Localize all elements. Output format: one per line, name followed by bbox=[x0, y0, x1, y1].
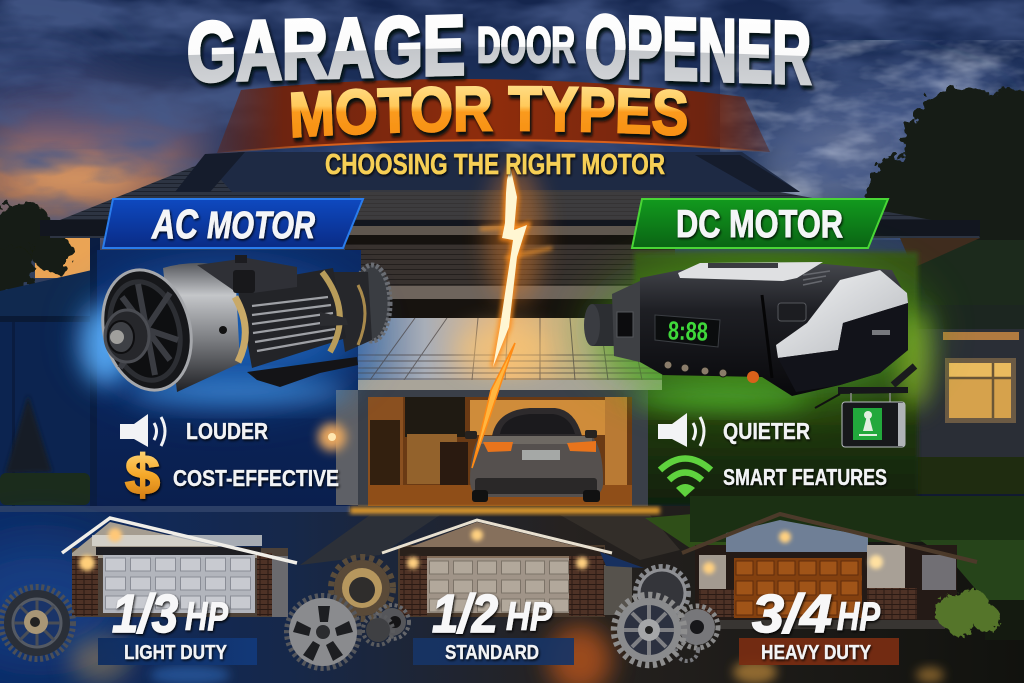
bush bbox=[935, 589, 1000, 637]
horsepower: 3/4 HP heavy duty: HP bbox=[837, 595, 880, 639]
right panel: DC background bbox=[634, 252, 918, 506]
garage: light duty bbox=[62, 518, 297, 617]
horsepower: 3/4 HP heavy duty bbox=[739, 584, 899, 665]
label bar: light duty bbox=[98, 638, 257, 665]
bolt of lightning divider bbox=[472, 165, 552, 468]
DC side glow bbox=[595, 260, 931, 410]
icon: wall control with person bbox=[842, 393, 905, 447]
house: right wing with lit window bbox=[900, 238, 1024, 494]
label bar: light duty: LIGHT DUTY bbox=[124, 642, 228, 664]
garage opening with car bbox=[358, 390, 648, 508]
icon: quiet speaker bbox=[658, 413, 704, 447]
text: quieter: QUIETER bbox=[723, 418, 810, 444]
panel: DC motor bbox=[584, 199, 915, 497]
house: left wing bbox=[0, 238, 100, 508]
DC heading banner: DC MOTOR bbox=[676, 203, 843, 246]
horsepower: 3/4 HP heavy duty: 3/4 bbox=[752, 584, 832, 644]
house: central siding and bands bbox=[345, 226, 675, 318]
text: smart features: SMART FEATURES bbox=[723, 464, 887, 490]
horsepower: 1/2 HP standard: HP bbox=[506, 595, 552, 639]
title: motor types: MOTOR TYPES bbox=[290, 86, 690, 144]
tree: right bbox=[865, 88, 1024, 310]
garage door panel raised bbox=[358, 318, 662, 390]
title: garage door opener: DOOR bbox=[477, 17, 575, 73]
horsepower: 1/3 HP light duty: 1/3 bbox=[112, 584, 178, 644]
panel: AC motor bbox=[91, 199, 390, 506]
subtitle: CHOOSING THE RIGHT MOTOR bbox=[325, 149, 665, 181]
wall and lamp beside the garage opening bbox=[318, 390, 360, 505]
label bar: heavy duty: HEAVY DUTY bbox=[761, 642, 872, 664]
text: cost-effective: COST-EFFECTIVE bbox=[173, 465, 339, 491]
AC side glow bbox=[81, 273, 360, 404]
horsepower: 1/2 HP standard: 1/2 bbox=[432, 584, 498, 644]
garage: standard bbox=[382, 520, 644, 617]
gear: left single bbox=[1, 587, 73, 659]
house: upper gable bbox=[190, 152, 800, 192]
label bar: standard: STANDARD bbox=[445, 642, 539, 664]
label bar: heavy duty bbox=[739, 638, 899, 665]
AC motor illustration bbox=[91, 255, 390, 400]
gears: right cluster bbox=[614, 567, 718, 665]
tree: left bbox=[0, 202, 72, 292]
icon: loud speaker bbox=[120, 414, 165, 447]
car bbox=[465, 408, 603, 502]
ground and driveway bbox=[0, 496, 1024, 683]
label bar: standard bbox=[413, 638, 574, 665]
left panel: AC background bbox=[97, 250, 361, 506]
icon: wifi bbox=[660, 458, 711, 497]
gears: center cluster bbox=[287, 557, 409, 668]
AC heading banner: AC bbox=[151, 201, 199, 247]
icon: dollar sign: $ bbox=[125, 443, 160, 506]
house: main roof bbox=[40, 152, 980, 238]
title ribbon bbox=[217, 79, 770, 153]
AC heading banner: MOTOR bbox=[207, 205, 315, 247]
background: evening sky bbox=[0, 0, 1024, 300]
horsepower: 1/2 HP standard bbox=[413, 584, 574, 665]
DC motor illustration bbox=[584, 262, 915, 408]
DC motor illustration: 8:88 bbox=[667, 315, 708, 347]
AC heading banner bbox=[103, 199, 363, 248]
garage: heavy duty bbox=[682, 514, 977, 629]
text: louder: LOUDER bbox=[186, 418, 268, 444]
horsepower: 1/3 HP light duty: HP bbox=[185, 595, 228, 639]
title: garage door opener bbox=[187, 0, 811, 102]
horsepower: 1/3 HP light duty bbox=[98, 584, 257, 665]
